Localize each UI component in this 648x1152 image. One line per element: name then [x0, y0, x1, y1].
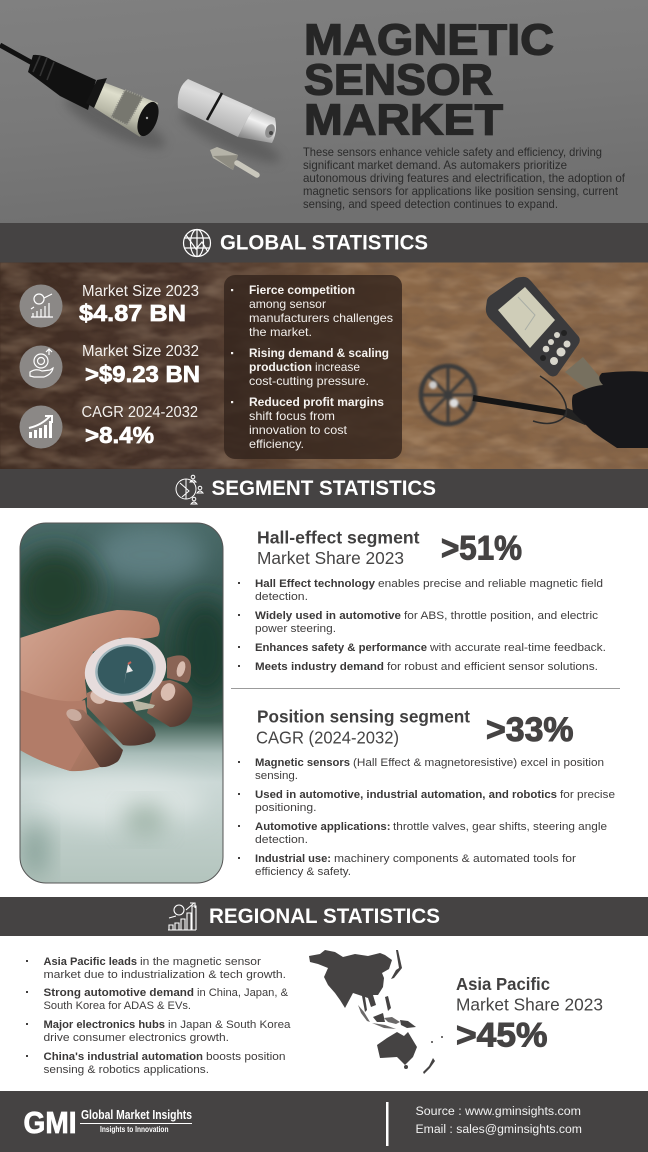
heading: GLOBAL STATISTICS — [220, 232, 428, 254]
regional bullet list: boosts position — [206, 1051, 286, 1063]
stat: market size 2023: Market Size 2023 — [82, 283, 199, 300]
text panel: challenges: the market. — [249, 325, 312, 339]
segment: hall-effect: Enhances safety & performance — [255, 642, 427, 654]
text panel: challenges: efficiency. — [249, 437, 304, 451]
heading: REGIONAL STATISTICS — [209, 905, 440, 928]
regional bullet list: sensing & robotics applications. — [44, 1064, 209, 1076]
text panel: challenges: innovation to cost — [249, 423, 348, 437]
stat: market size 2032: >$9.23 BN — [85, 361, 200, 387]
panel: segment statistics — [20, 522, 620, 884]
segment: hall-effect: Hall Effect technology — [255, 578, 376, 590]
stat: CAGR: CAGR 2024-2032 — [82, 404, 198, 421]
logo: Global Market Insights: Global Market Insights — [81, 1108, 192, 1122]
logo: Global Market Insights — [24, 1105, 192, 1140]
text panel: challenges: increase — [315, 360, 360, 374]
photo: hand holding compass — [15, 523, 235, 883]
segment: hall-effect: with accurate real-time feedback. — [429, 642, 606, 654]
segment: hall-effect: for robust and efficient sensor solutions. — [387, 661, 598, 673]
segment: position sensing: for precise — [560, 789, 615, 801]
title — [304, 16, 554, 144]
intro paragraph — [303, 145, 626, 211]
contact details: Email : sales@gminsights.com — [416, 1122, 582, 1136]
segment: position sensing: Used in automotive, industrial automation, and robotics — [255, 789, 557, 801]
text panel: challenges: Rising demand & scaling — [249, 346, 389, 360]
heading: SEGMENT STATISTICS — [212, 477, 436, 500]
regional callout: >45% — [456, 1016, 548, 1054]
text panel: challenges: among sensor — [249, 297, 326, 311]
compass — [84, 638, 166, 711]
regional bullet list: Asia Pacific leads — [44, 956, 137, 968]
segment: hall-effect: >51% — [441, 530, 522, 568]
segment: position sensing: detection. — [255, 834, 308, 846]
stat: market size 2023 — [20, 283, 199, 328]
segment: position sensing: Position sensing segment — [257, 706, 470, 726]
photo: metal detector — [421, 277, 648, 448]
segment: hall-effect: for ABS, throttle position, and electric — [404, 610, 598, 622]
segment: position sensing: machinery components & automated tools for — [334, 853, 576, 865]
segment: position sensing — [238, 706, 615, 878]
logo: Global Market Insights: Insights to Innovation — [100, 1124, 168, 1134]
title: MAGNETIC — [304, 16, 554, 64]
icon: globe — [184, 230, 210, 256]
segment: position sensing: >33% — [486, 711, 574, 749]
logo: Global Market Insights: GMI — [24, 1105, 76, 1140]
segment: position sensing: Industrial use: — [255, 853, 331, 865]
segment: position sensing: throttle valves, gear shifts, steering angle — [393, 821, 607, 833]
icon: segment people — [176, 475, 203, 504]
segment: position sensing: efficiency & safety. — [255, 866, 351, 878]
photo: magnetic sensor connector and parts — [0, 45, 285, 175]
regional callout: Market Share 2023 — [456, 994, 603, 1014]
intro paragraph: sensing, and speed detection continues to expand. — [303, 197, 558, 211]
segment: position sensing: Automotive applications: — [255, 821, 390, 833]
segment: position sensing: positioning. — [255, 802, 316, 814]
stat: market size 2023: $4.87 BN — [79, 300, 186, 326]
segment: position sensing: (Hall Effect & magnetoresistive) excel in position — [353, 757, 604, 769]
regional bullet list: in Japan & South Korea — [168, 1019, 291, 1031]
panel: header — [0, 0, 648, 223]
intro paragraph: magnetic sensors for applications like position sensing, current — [303, 184, 619, 198]
text panel: challenges: Fierce competition — [249, 283, 355, 297]
segment: position sensing: CAGR (2024-2032) — [256, 728, 399, 748]
text panel: challenges: manufacturers challenges — [249, 311, 393, 325]
segment: position sensing: Magnetic sensors — [255, 757, 350, 769]
regional bullet list: in China, Japan, & — [197, 987, 288, 999]
regional bullet list — [26, 956, 291, 1076]
regional bullet list: market due to industrialization & tech growth. — [44, 969, 286, 981]
segment: hall-effect: Hall-effect segment — [257, 528, 420, 548]
segment: hall-effect: detection. — [255, 591, 308, 603]
section band: global statistics — [0, 223, 648, 262]
regional callout — [456, 974, 603, 1054]
contact details — [416, 1104, 582, 1136]
icon: bar chart with coin — [168, 903, 196, 930]
intro paragraph: autonomous driving features and electrification, the adoption of — [303, 171, 626, 185]
text panel: challenges — [224, 275, 402, 459]
segment: hall-effect — [238, 528, 606, 673]
footer — [0, 1091, 648, 1152]
contact details: Source : www.gminsights.com — [416, 1104, 581, 1118]
intro paragraph: These sensors enhance vehicle safety and efficiency, driving — [303, 145, 602, 159]
stat: market size 2032: Market Size 2032 — [82, 343, 199, 360]
regional bullet list: in the magnetic sensor — [140, 956, 261, 968]
intro paragraph: significant market demand. As automakers prioritize — [303, 158, 567, 172]
segment: hall-effect: Widely used in automotive — [255, 610, 401, 622]
segment: hall-effect: Meets industry demand — [255, 661, 384, 673]
text panel: challenges: cost-cutting pressure. — [249, 374, 369, 388]
text panel: challenges: production — [249, 360, 312, 374]
stat: CAGR: >8.4% — [85, 422, 154, 448]
segment: hall-effect: Market Share 2023 — [257, 548, 404, 568]
segment: position sensing: sensing. — [255, 770, 298, 782]
segment: hall-effect: power steering. — [255, 623, 336, 635]
regional bullet list: Major electronics hubs — [44, 1019, 165, 1031]
regional callout: Asia Pacific — [456, 974, 550, 994]
regional bullet list: Strong automotive demand — [44, 987, 194, 999]
text panel: challenges: shift focus from — [249, 409, 335, 423]
section band: segment statistics — [0, 469, 648, 508]
title: SENSOR — [304, 56, 493, 104]
panel: regional statistics — [0, 936, 648, 1091]
regional bullet list: South Korea for ADAS & EVs. — [44, 1000, 191, 1012]
regional bullet list: drive consumer electronics growth. — [44, 1032, 229, 1044]
section band: regional statistics — [0, 897, 648, 936]
segment: hall-effect: enables precise and reliable magnetic field — [378, 578, 603, 590]
hand — [20, 610, 192, 771]
regional bullet list: China's industrial automation — [44, 1051, 203, 1063]
text panel: challenges: Reduced profit margins — [249, 395, 384, 409]
title: MARKET — [304, 96, 503, 144]
panel: global statistics — [0, 262, 648, 469]
map: Asia Pacific — [309, 950, 443, 1074]
stat: CAGR — [20, 404, 198, 448]
stat: market size 2032 — [20, 343, 200, 388]
